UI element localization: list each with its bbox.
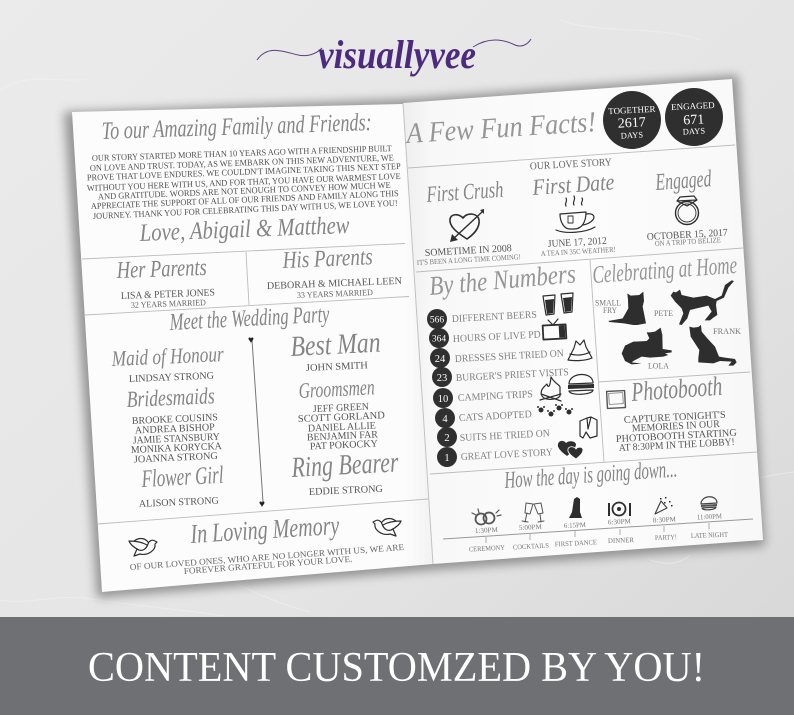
badge: engaged days: DAYS	[682, 125, 706, 137]
panel: wedding party	[110, 302, 400, 510]
timeline labels: FIRST DANCE	[555, 538, 597, 548]
stat: 2 suits: 2	[444, 433, 450, 444]
icon: television	[543, 319, 566, 340]
timeline labels: CEREMONY	[469, 544, 505, 553]
cat names	[595, 298, 741, 370]
milestone: first crush	[417, 177, 521, 267]
icon: champagne glasses	[522, 503, 544, 522]
milestone: first date: A TEA IN 35C WEATHER!	[541, 245, 616, 258]
stat: 4 cats adopted: 4	[442, 414, 448, 425]
milestone: first crush: SOMETIME IN 2008	[425, 243, 512, 259]
stat: 1 great love story	[437, 447, 554, 467]
divider with hearts: ♥	[259, 499, 265, 510]
panel: wedding party: Best Man	[290, 327, 381, 363]
icon: beers	[543, 293, 573, 315]
stat: 566 different beers: 566	[430, 316, 444, 326]
stat: 4 cats adopted	[435, 408, 532, 428]
stat: 1 great love story: GREAT LOVE STORY	[461, 447, 554, 463]
timeline times: 6:15PM	[564, 521, 587, 530]
panel: his parents: His Parents	[281, 244, 373, 274]
text block: welcome message	[87, 143, 401, 221]
panel: wedding party: JEFF GREEN	[313, 402, 370, 415]
stat: 364 hours of live pd	[429, 328, 541, 348]
milestone: engaged: OCTOBER 15, 2017	[647, 227, 728, 243]
cat names: FRY	[603, 306, 617, 315]
text block: welcome message: ON LOVE AND TRUST. TODAY, AS WE EMBARK ON THIS NEW ADVENTURE, WE	[90, 152, 394, 173]
cat names: PETE	[654, 309, 673, 318]
panel: left page	[72, 104, 433, 592]
panel: by the numbers: By the Numbers	[428, 258, 577, 301]
panel: wedding party: BROOKE COUSINS	[132, 412, 218, 427]
stat: 24 dresses: 24	[435, 354, 446, 365]
panel: wedding party: Ring Bearer	[290, 446, 400, 484]
icon: dancing couple	[569, 497, 582, 518]
panel: right page	[403, 79, 763, 564]
panel: celebrating at home	[592, 252, 741, 370]
panel: photobooth	[607, 371, 738, 454]
cat names: LOLA	[648, 362, 669, 370]
panel: wedding party: Bridesmaids	[126, 383, 215, 412]
timeline labels: PARTY!	[655, 533, 677, 542]
icon: campfire	[540, 377, 561, 401]
timeline labels	[469, 531, 729, 553]
stat: 23 burger's priest visits: BURGER'S PRIEST VISITS	[456, 367, 569, 384]
cat names: FRANK	[713, 327, 741, 336]
icon: burger	[568, 374, 594, 394]
icon: rings	[472, 509, 501, 524]
badge: engaged days	[665, 88, 723, 146]
icon: small burger	[701, 497, 717, 510]
stat: 566 different beers	[427, 309, 537, 329]
panel: wedding party: EDDIE STRONG	[309, 484, 384, 498]
stat: 2 suits: SUITS HE TRIED ON	[460, 428, 551, 444]
badge: engaged days: ENGAGED	[671, 100, 715, 112]
panel: her parents: 32 YEARS MARRIED	[131, 297, 206, 310]
divider with hearts: ♥	[248, 335, 254, 346]
timeline times: 11:00PM	[697, 512, 723, 521]
panel: love story	[417, 157, 728, 267]
stat: 1 great love story: 1	[444, 453, 450, 464]
panel: wedding party: MONIKA KORYCKA	[131, 441, 223, 456]
icon: heart with arrow	[450, 209, 484, 242]
icon: dove left	[129, 538, 157, 556]
icon: suit jacket	[580, 417, 597, 438]
panel: love story: OUR LOVE STORY	[530, 157, 612, 172]
milestone: first date: First Date	[531, 169, 615, 200]
milestone: engaged	[647, 166, 728, 248]
timeline times: 8:30PM	[653, 515, 677, 524]
badge: together days: 2617	[617, 115, 646, 132]
timeline times: 1:30PM	[475, 526, 499, 535]
icon: cat lola	[622, 328, 672, 364]
stat: 24 dresses: DRESSES SHE TRIED ON	[455, 348, 565, 365]
panel: photobooth: AT 8:30PM IN THE LOBBY!	[619, 437, 735, 454]
timeline times: 5:00PM	[519, 523, 543, 532]
timeline times: 6:30PM	[608, 517, 632, 526]
panel: wedding party: DANIEL ALLIE	[308, 421, 376, 434]
icon: cat small fry	[608, 292, 646, 325]
panel: photobooth: MEMORIES IN OUR	[632, 419, 720, 434]
stat: 4 cats adopted: CATS ADOPTED	[459, 409, 532, 424]
panel: in loving memory: In Loving Memory	[189, 510, 340, 549]
panel: wedding party: ALISON STRONG	[139, 495, 220, 510]
panel: in loving memory: FOREVER GRATEFUL FOR YOUR LOVE.	[183, 554, 353, 576]
panel: his parents	[267, 244, 403, 300]
panel: wedding party: Flower Girl	[140, 462, 224, 493]
badge: together days: DAYS	[620, 129, 644, 141]
heading: meet the wedding party: Meet the Wedding Party	[168, 302, 330, 336]
icon: dove right	[373, 518, 401, 536]
panel: her parents	[116, 255, 215, 310]
stat: 364 hours of live pd: 364	[432, 334, 446, 344]
badge: engaged days: 671	[683, 112, 705, 129]
page shadow	[64, 75, 765, 598]
logo: visuallyvee: visuallyvee	[318, 32, 476, 77]
panel: wedding party: Groomsmen	[298, 374, 375, 403]
timeline labels: COCKTAILS	[513, 542, 549, 551]
stat: 10 camping trips	[433, 388, 533, 408]
panel: wedding party: JAMIE STANSBURY	[133, 432, 221, 446]
panel: wedding party: JOANNA STRONG	[134, 451, 219, 465]
icon: party popper	[655, 497, 672, 514]
stat: 23 burger's priest visits: 23	[437, 373, 447, 384]
panel: wedding party: SCOTT GORLAND	[298, 410, 385, 425]
panel: wedding party: JOHN SMITH	[306, 360, 369, 374]
panel: in loving memory	[129, 510, 404, 576]
milestone: engaged: Engaged	[654, 166, 713, 196]
heading: fun facts: A Few Fun Facts!	[404, 106, 597, 150]
panel: wedding party: PAT POKOCKY	[310, 439, 379, 452]
divider with hearts	[248, 335, 265, 510]
icon: paw prints	[537, 404, 573, 416]
panel: her parents: Her Parents	[116, 255, 207, 284]
milestone: first date	[531, 169, 616, 258]
text block: welcome message: JOURNEY. THANK YOU FOR CELEBRATING THIS DAY WITH US, WE LOVE YOU!	[93, 198, 398, 221]
milestone: first date: JUNE 17, 2012	[548, 236, 607, 250]
logo: visuallyvee	[257, 32, 531, 77]
panel: timeline	[443, 457, 753, 553]
panel: his parents: DEBORAH & MICHAEL LEEN	[267, 276, 403, 292]
icon: cat frank	[689, 325, 737, 366]
stat: 24 dresses	[430, 348, 565, 368]
icon: cat pete	[671, 280, 734, 325]
panel: photobooth: Photobooth	[630, 371, 723, 407]
panel: photobooth: PHOTOBOOTH STARTING	[616, 428, 738, 445]
panel: by the numbers	[427, 258, 597, 467]
icon: diamond ring	[676, 196, 698, 224]
text block: welcome message: AND GRATITUDE. WORDS ARE NOT ENOUGH TO CONVEY HOW MUCH WE	[98, 180, 391, 201]
icon: dress	[568, 340, 592, 361]
icon: teacup	[556, 196, 595, 232]
text block: welcome message: WITHOUT YOU HERE WITH US, AND FOR THAT, YOU HAVE OUR WARMEST LOVE	[87, 171, 401, 193]
panel: wedding party: Maid of Honour	[110, 341, 224, 371]
panel: wedding party: BENJAMIN FAR	[307, 429, 378, 443]
panel: timeline: How the day is going down...	[503, 457, 678, 494]
stat: 10 camping trips: CAMPING TRIPS	[458, 389, 533, 404]
panel: wedding party: LINDSAY STRONG	[129, 371, 215, 385]
heading: welcome: To our Amazing Family and Friends:	[101, 109, 372, 145]
milestone: first crush: IT'S BEEN A LONG TIME COMING!	[417, 252, 521, 267]
stat: 566 different beers: DIFFERENT BEERS	[452, 310, 537, 325]
icon: hearts	[558, 441, 583, 459]
banner: CONTENT CUSTOMZED BY YOU!	[88, 645, 705, 691]
icon: plate and cutlery	[608, 502, 631, 516]
stat: 23 burger's priest visits	[432, 367, 569, 387]
stat: 2 suits	[437, 427, 551, 447]
panel: in loving memory: OF OUR LOVED ONES, WHO ARE NO LONGER WITH US, WE ARE	[129, 542, 404, 572]
stat: 10 camping trips: 10	[438, 394, 448, 405]
text block: welcome message: OUR STORY STARTED MORE THAN 10 YEARS AGO WITH A FRIENDSHIP BUILT	[92, 143, 392, 163]
panel: his parents: 33 YEARS MARRIED	[297, 287, 373, 300]
text block: welcome message: APPRECIATE THE SUPPORT OF ALL OF OUR FRIENDS AND FAMILY ALONG THIS	[91, 188, 399, 211]
milestone: first crush: First Crush	[425, 177, 504, 207]
timeline labels: DINNER	[608, 536, 634, 545]
stat: 364 hours of live pd: HOURS OF LIVE PD	[453, 329, 541, 345]
badge: together days: TOGETHER	[608, 104, 656, 116]
timeline times	[475, 512, 723, 535]
cat names: SMALL	[595, 298, 621, 308]
milestone: engaged: ON A TRIP TO BELIZE	[655, 235, 721, 248]
panel: photobooth: CAPTURE TONIGHT'S	[624, 410, 726, 426]
text block: welcome message: PROVE THAT LOVE ENDURES. WE COULDN'T IMAGINE TAKING THIS NEXT STEP	[87, 161, 401, 182]
timeline labels: LATE NIGHT	[691, 531, 729, 540]
panel: her parents: LISA & PETER JONES	[121, 287, 215, 302]
icon: polaroid	[607, 391, 625, 408]
heading: signature: Love, Abigail & Matthew	[138, 212, 350, 247]
badge: together days	[603, 91, 661, 149]
panel: wedding party: ANDREA BISHOP	[135, 422, 215, 436]
banner	[0, 617, 794, 715]
